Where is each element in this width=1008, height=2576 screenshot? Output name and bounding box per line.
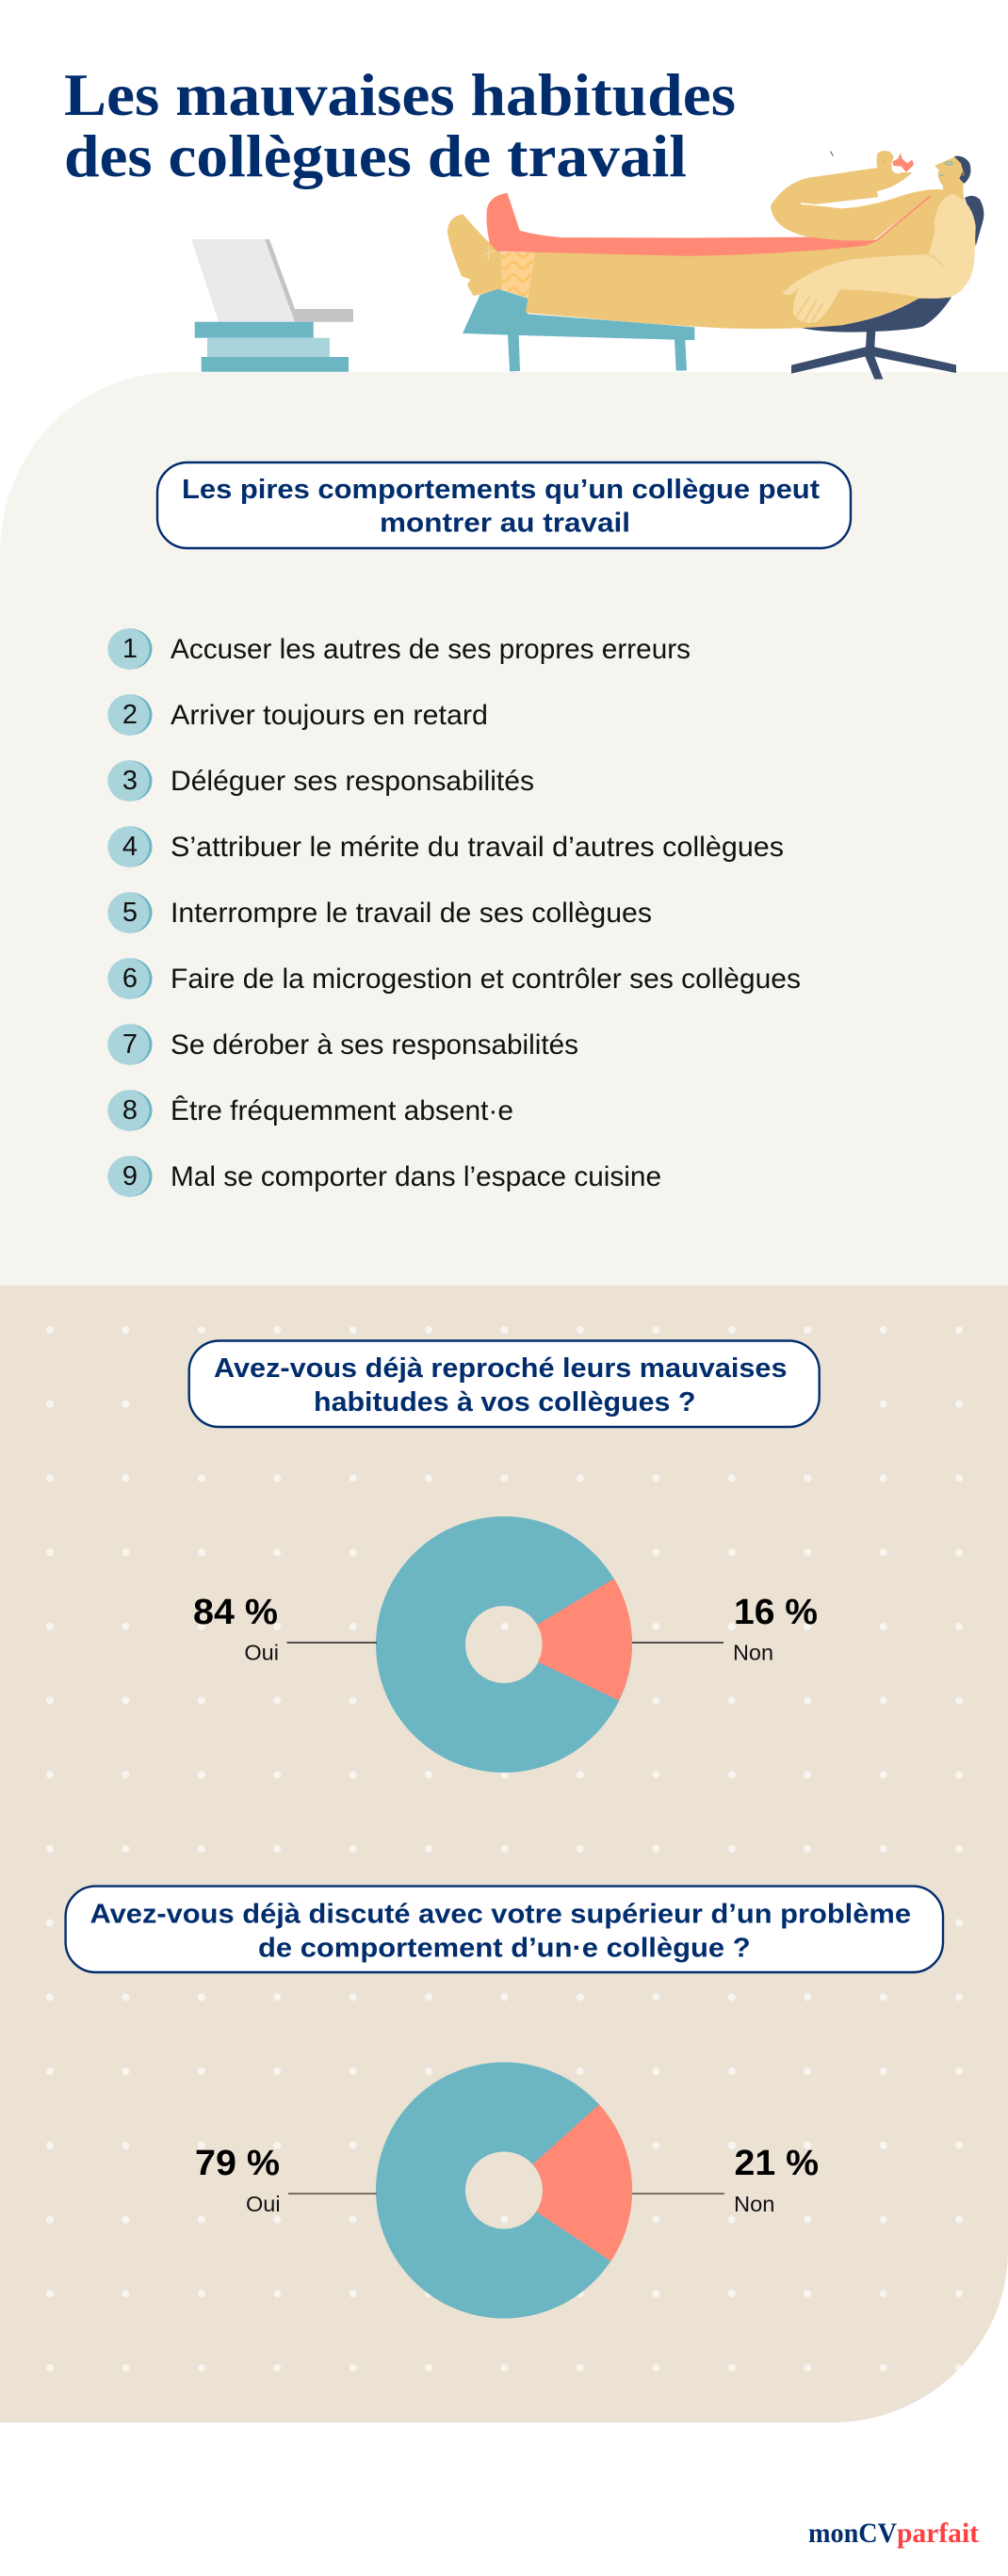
item 8: Être fréquemment absent·e — [171, 1095, 513, 1126]
panel: worst behaviours background — [0, 372, 1008, 1287]
item 3: Déléguer ses responsabilités — [171, 766, 534, 797]
item 3 — [107, 760, 534, 802]
icon: laptop on stack of books — [191, 239, 353, 372]
item 5 — [107, 892, 652, 933]
item 7: Se dérober à ses responsabilités — [171, 1029, 578, 1061]
item 7 — [107, 1024, 578, 1065]
item 9: 9 — [122, 1161, 138, 1191]
donut chart: 79 % oui, 21 % non: 79 % — [195, 2144, 280, 2183]
heading: second survey question — [66, 1887, 943, 1972]
item 8: 8 — [122, 1095, 138, 1126]
illustration: man with feet on the table — [447, 151, 984, 380]
item 6 — [107, 958, 801, 999]
heading: first survey question: habitudes à vos collègues ? — [314, 1387, 695, 1418]
title: Les mauvaises habitudes — [64, 61, 736, 128]
heading: worst behaviours: Les pires comportements qu’un collègue peut — [182, 475, 820, 505]
item 2: 2 — [122, 700, 138, 730]
table — [463, 289, 694, 371]
heading: second survey question: de comportement d’un·e collègue ? — [258, 1934, 751, 1964]
item 7: 7 — [122, 1029, 138, 1060]
donut chart: 84 % oui, 16 % non: 84 % — [193, 1593, 278, 1632]
item 6: 6 — [122, 964, 138, 994]
item 1: Accuser les autres de ses propres erreurs — [171, 634, 691, 665]
donut chart: 84 % oui, 16 % non: Oui — [244, 1641, 279, 1665]
coral trousers and shoe — [487, 193, 876, 256]
donut chart: 79 % oui, 21 % non: 21 % — [735, 2144, 819, 2183]
chair — [791, 196, 984, 380]
heading: worst behaviours — [157, 462, 851, 548]
donut chart: 84 % oui, 16 % non: 16 % — [734, 1593, 818, 1632]
item 1: 1 — [122, 634, 138, 664]
panel: survey background with dots — [0, 1286, 1008, 2422]
raised arm — [771, 151, 944, 240]
title: des collègues de travail — [64, 122, 687, 189]
heading: first survey question: Avez-vous déjà reproché leurs mauvaises — [214, 1353, 788, 1384]
item 3: 3 — [122, 766, 138, 796]
item 9 — [107, 1156, 661, 1197]
item 5: 5 — [122, 898, 138, 928]
item 6: Faire de la microgestion et contrôler ses collègues — [171, 964, 801, 995]
donut chart: 79 % oui, 21 % non: Non — [734, 2192, 774, 2216]
logo: monCVparfait: monCV — [808, 2518, 897, 2549]
sock — [501, 252, 535, 299]
heading: second survey question: Avez-vous déjà discuté avec votre supérieur d’un problème — [90, 1900, 911, 1930]
face — [831, 152, 964, 176]
body and trousers — [526, 157, 973, 329]
item 1 — [107, 628, 691, 670]
item 2 — [107, 694, 488, 736]
list: worst behaviours — [107, 628, 801, 1197]
heading: first survey question — [189, 1341, 820, 1427]
item 8 — [107, 1090, 513, 1131]
object in hand — [891, 153, 914, 173]
item 4 — [107, 826, 784, 867]
donut chart: 84 % oui, 16 % non: Non — [733, 1641, 773, 1665]
donut chart: 79 % oui, 21 % non — [195, 2063, 819, 2319]
foot — [447, 214, 502, 296]
light arm — [783, 194, 976, 323]
item 4: 4 — [122, 832, 138, 862]
shirt line — [869, 196, 931, 243]
item 5: Interrompre le travail de ses collègues — [171, 898, 652, 929]
hair — [954, 156, 970, 184]
logo: monCVparfait — [808, 2518, 979, 2549]
heading: worst behaviours: montrer au travail — [380, 509, 630, 539]
title — [64, 61, 736, 189]
item 2: Arriver toujours en retard — [171, 700, 488, 731]
donut chart: 79 % oui, 21 % non: Oui — [246, 2192, 281, 2216]
donut chart: 84 % oui, 16 % non — [193, 1516, 818, 1773]
logo: monCVparfait: parfait — [897, 2518, 979, 2549]
item 4: S’attribuer le mérite du travail d’autres collègues — [171, 832, 784, 863]
item 9: Mal se comporter dans l’espace cuisine — [171, 1161, 661, 1192]
